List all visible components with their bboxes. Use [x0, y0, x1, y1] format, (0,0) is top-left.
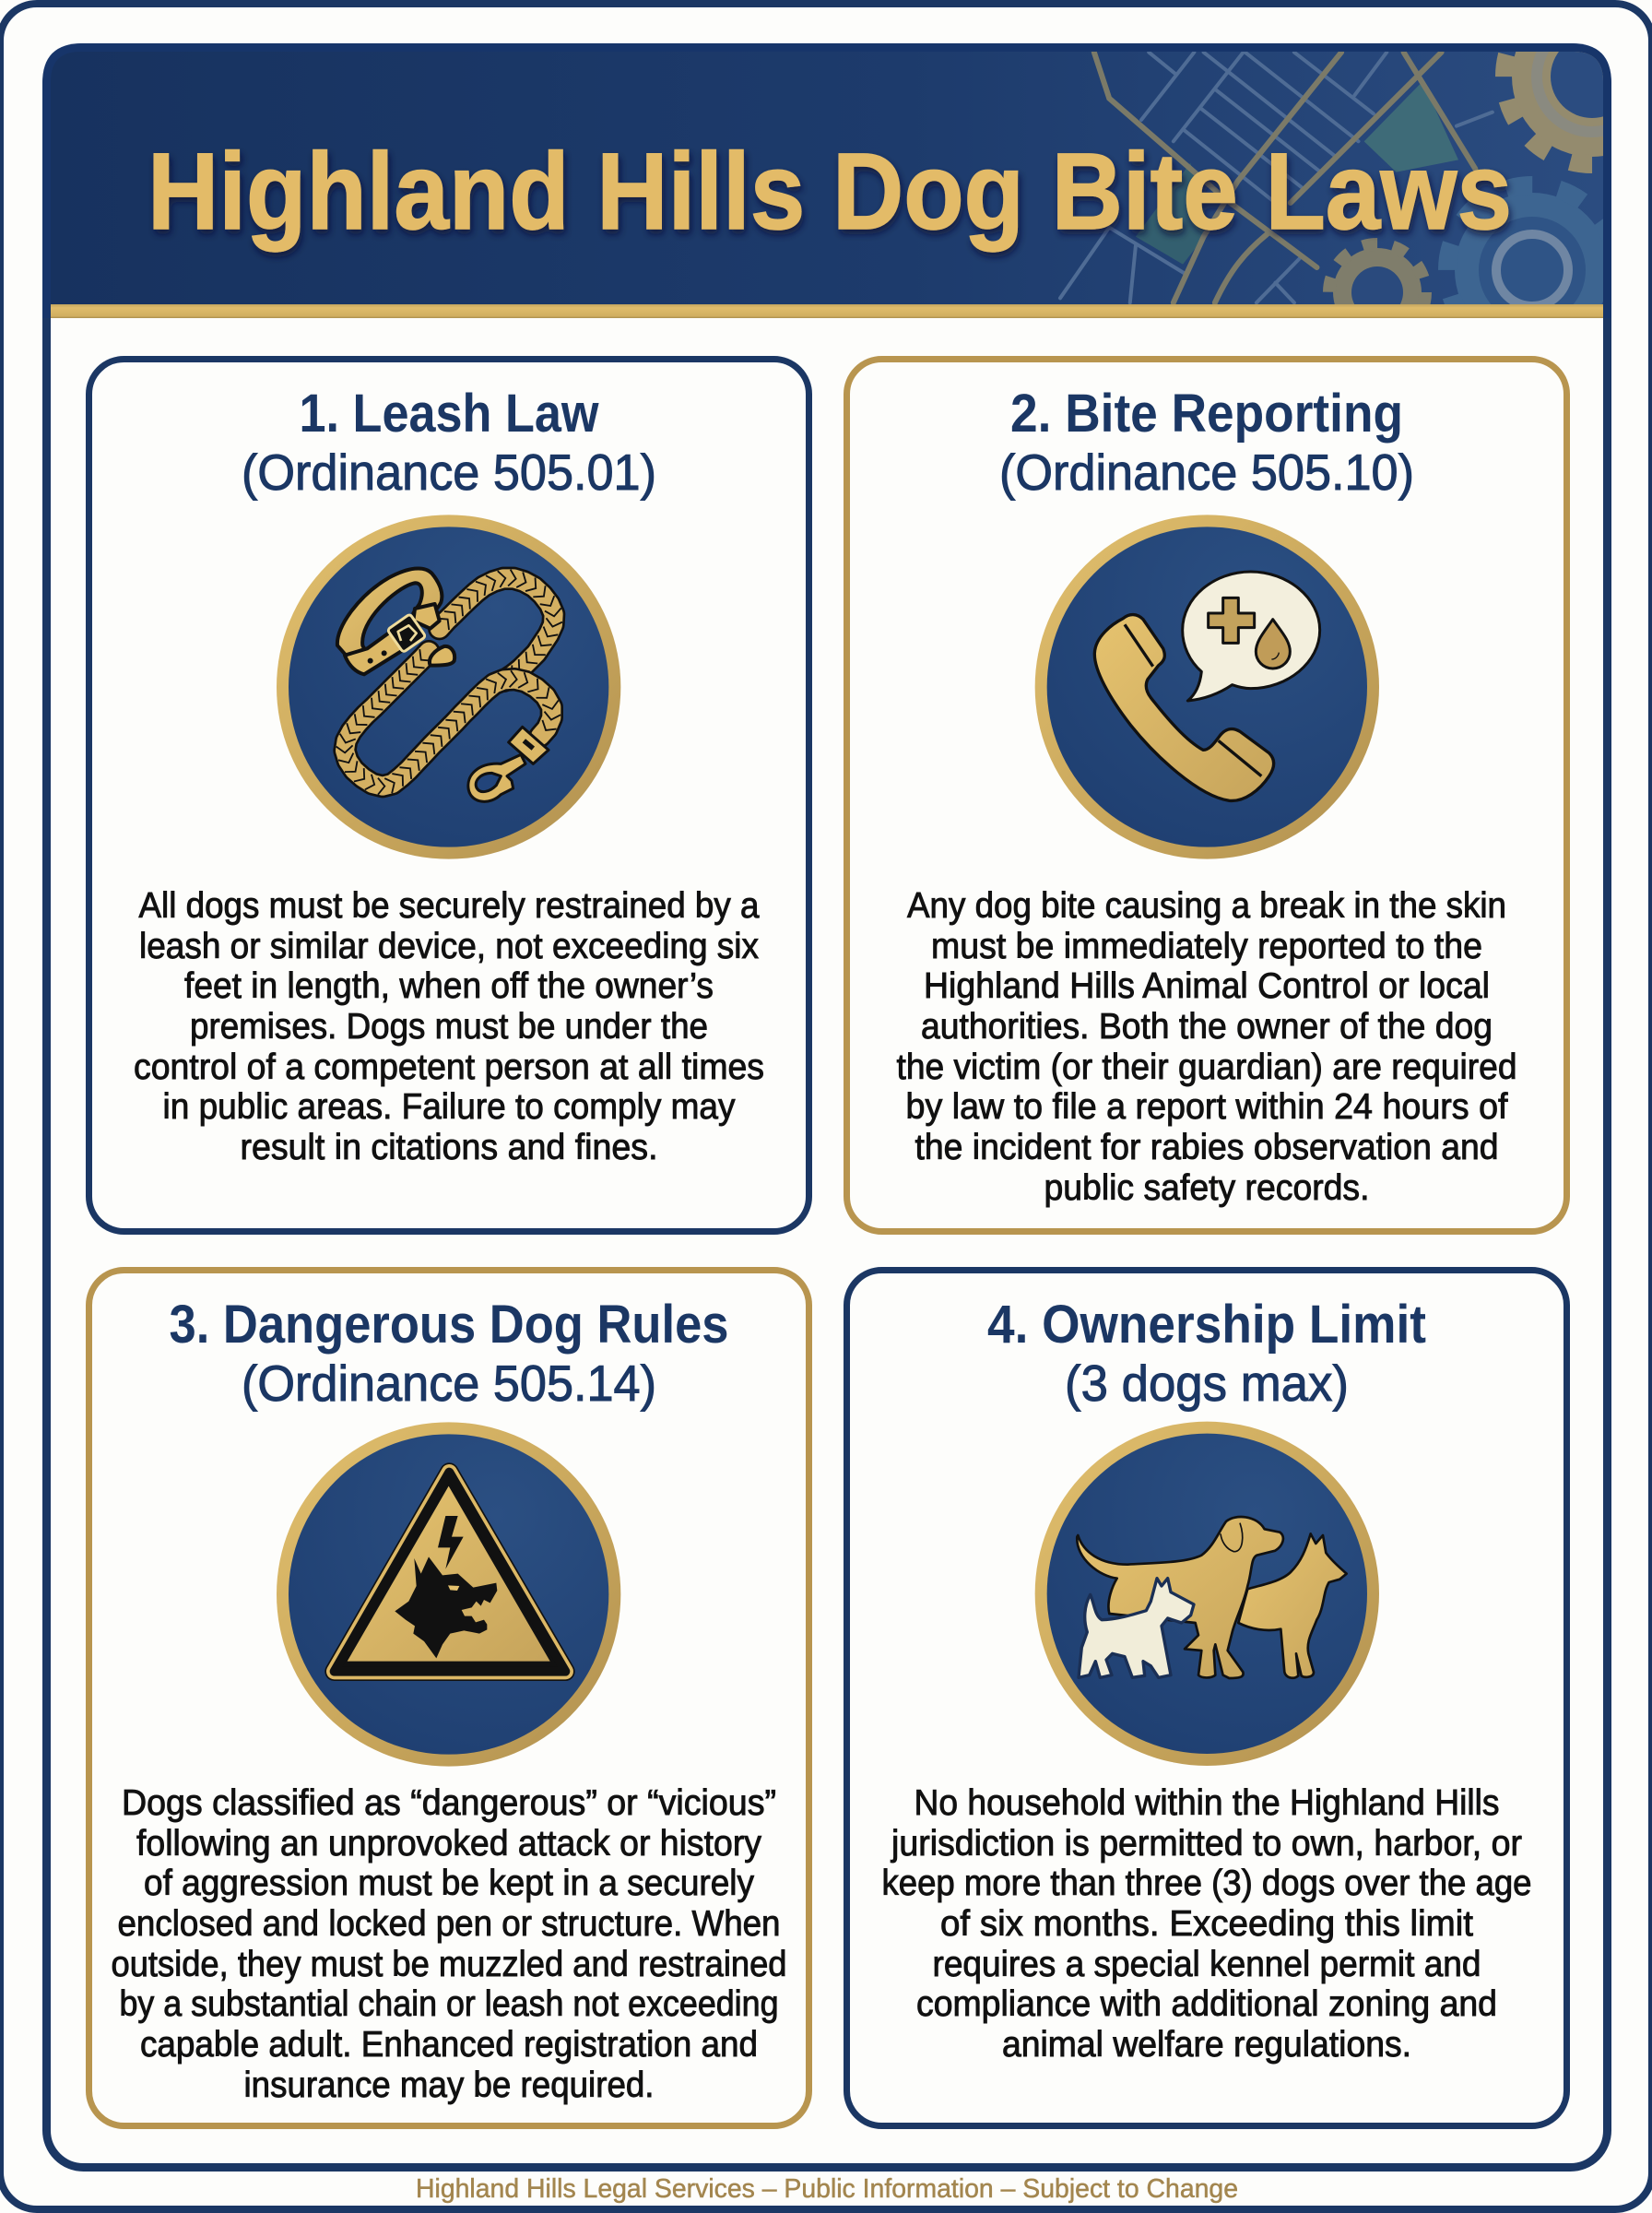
- body text: dangerous dog rules: of aggression must be kept in a securely: [144, 1864, 755, 1903]
- body text: dangerous dog rules: Dogs classified as “dangerous” or “vicious”: [122, 1783, 776, 1823]
- heading: dangerous dog rules: [170, 1295, 728, 1412]
- card border: bite reporting: [846, 360, 1567, 1232]
- body text: bite reporting: by law to file a report within 24 hours of: [905, 1087, 1508, 1127]
- speech bubble: [1183, 572, 1320, 701]
- heading: bite reporting: (Ordinance 505.10): [999, 444, 1414, 501]
- heading: bite reporting: [999, 384, 1414, 501]
- card border: dangerous dog rules: [88, 1271, 809, 2126]
- body text: ownership limit: No household within the Highland Hills: [914, 1783, 1499, 1823]
- scottie dog: [1079, 1579, 1194, 1677]
- heading: ownership limit: 4. Ownership Limit: [987, 1295, 1426, 1355]
- body text: dangerous dog rules: by a substantial chain or leash not exceeding: [120, 1984, 778, 2024]
- body text: leash law: result in citations and fines.: [240, 1128, 658, 1167]
- snarling dog head: [395, 1556, 497, 1658]
- collar: [337, 568, 454, 674]
- heading: dangerous dog rules: 3. Dangerous Dog Rules: [170, 1295, 728, 1355]
- heading: dangerous dog rules: (Ordinance 505.14): [242, 1355, 656, 1412]
- footer: Highland Hills Legal Services – Public Information – Subject to Change: [416, 2174, 1238, 2204]
- panel: bite reporting: [846, 360, 1567, 1232]
- header banner: [42, 43, 1611, 318]
- body text: leash law: control of a competent person at all times: [134, 1047, 764, 1087]
- panel: ownership limit: [846, 1271, 1567, 2126]
- icon: phone with speech bubble: [1035, 515, 1379, 859]
- lightning bolt: [438, 1516, 464, 1569]
- body text: ownership limit: jurisdiction is permitted to own, harbor, or: [891, 1824, 1522, 1864]
- body text: bite reporting: authorities. Both the owner of the dog: [921, 1007, 1493, 1047]
- body text: ownership limit: requires a special kennel permit and: [933, 1945, 1481, 1984]
- title: Highland Hills Dog Bite Laws: [148, 131, 1512, 253]
- body text: dangerous dog rules: insurance may be required.: [243, 2065, 655, 2105]
- heading: bite reporting: 2. Bite Reporting: [1010, 384, 1403, 444]
- body text: ownership limit: of six months. Exceeding this limit: [940, 1904, 1473, 1944]
- icon: warning triangle with snarling dog: [277, 1422, 620, 1767]
- body text: ownership limit: keep more than three (3) dogs over the age: [881, 1864, 1532, 1903]
- icon: three dogs: [1035, 1422, 1379, 1766]
- body text: dangerous dog rules: capable adult. Enhanced registration and: [140, 2025, 758, 2065]
- panel: leash law: [88, 360, 809, 1232]
- body text: bite reporting: Any dog bite causing a break in the skin: [907, 886, 1506, 926]
- body text: leash law: leash or similar device, not exceeding six: [139, 927, 759, 966]
- telephone handset: [1094, 615, 1274, 800]
- body text: bite reporting: public safety records.: [1044, 1168, 1370, 1208]
- icon: collar and braided leash: [277, 515, 620, 859]
- labrador dog: [1077, 1517, 1283, 1678]
- body text: leash law: All dogs must be securely restrained by a: [138, 886, 760, 926]
- leash clasp: [468, 727, 549, 801]
- heading: ownership limit: (3 dogs max): [1065, 1355, 1349, 1412]
- body text: ownership limit: [881, 1783, 1532, 2065]
- body text: dangerous dog rules: following an unprovoked attack or history: [136, 1824, 762, 1864]
- header map and gears artwork: [1058, 52, 1603, 304]
- heading: leash law: [242, 384, 656, 501]
- body text: leash law: in public areas. Failure to comply may: [162, 1087, 736, 1127]
- card border: ownership limit: [846, 1271, 1567, 2126]
- panel: dangerous dog rules: [88, 1271, 809, 2126]
- body text: bite reporting: [896, 886, 1517, 1208]
- heading: ownership limit: [987, 1295, 1426, 1412]
- body text: dangerous dog rules: [111, 1783, 787, 2105]
- heading: leash law: 1. Leash Law: [299, 384, 599, 444]
- body text: ownership limit: animal welfare regulations.: [1002, 2025, 1411, 2065]
- heading: leash law: (Ordinance 505.01): [242, 444, 656, 501]
- body text: bite reporting: Highland Hills Animal Control or local: [924, 966, 1490, 1006]
- body text: leash law: feet in length, when off the owner’s: [184, 966, 714, 1006]
- body text: leash law: [134, 886, 764, 1167]
- body text: bite reporting: must be immediately reported to the: [931, 927, 1482, 966]
- body text: dangerous dog rules: enclosed and locked pen or structure. When: [118, 1904, 780, 1944]
- card border: leash law: [88, 360, 809, 1232]
- body text: ownership limit: compliance with additional zoning and: [916, 1984, 1497, 2024]
- shepherd dog: [1238, 1533, 1347, 1678]
- body text: bite reporting: the victim (or their guardian) are required: [896, 1047, 1517, 1087]
- body text: leash law: premises. Dogs must be under the: [190, 1007, 708, 1047]
- body text: bite reporting: the incident for rabies observation and: [914, 1128, 1499, 1167]
- body text: dangerous dog rules: outside, they must be muzzled and restrained: [111, 1945, 787, 1984]
- gold bar: [51, 304, 1603, 318]
